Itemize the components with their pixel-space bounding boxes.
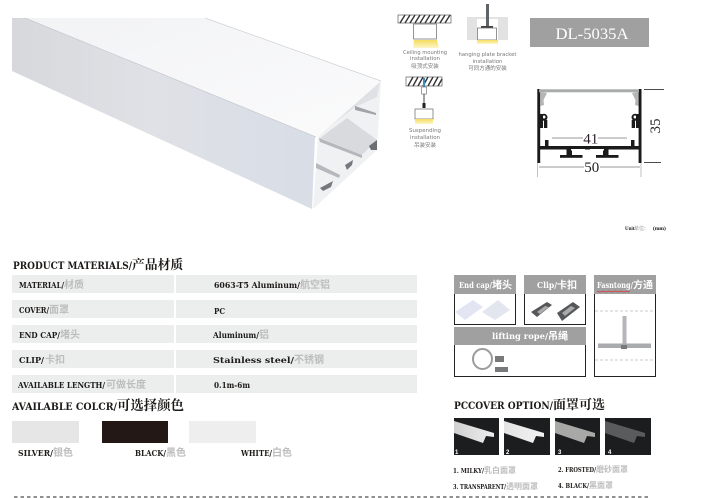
cover option legend: 透明面罩 (506, 481, 538, 492)
table: product materials: Stainless steel/ (213, 355, 294, 365)
product photo: aluminium profile (12, 18, 381, 209)
table: product materials: 航空铝 (300, 276, 330, 291)
cover option legend (453, 464, 628, 492)
table: product materials: 面罩 (49, 301, 69, 316)
colour swatches: SILVER/ (18, 448, 53, 458)
colour swatches: 银色 (53, 444, 73, 459)
heading: available color (11, 395, 184, 414)
cover option legend: 2. FROSTED/ (558, 467, 597, 474)
icon: suspending installation: 吊装安装 (414, 141, 436, 149)
cover option legend: 4. BLACK/ (558, 483, 590, 490)
table: product materials: COVER/ (19, 305, 49, 315)
panel: fastener (594, 275, 656, 376)
table: product materials (12, 275, 417, 393)
panel: clip: Clip/ (537, 280, 557, 290)
cover option thumbnails: 1 (455, 450, 459, 456)
icon: ceiling mounting installation: 吸顶式安装 (411, 62, 439, 70)
unit note: 单位: (634, 225, 646, 232)
table: product materials: Aluminum/ (212, 330, 259, 340)
table: product materials: CLIP/ (19, 355, 44, 365)
unit note: Unit/ (625, 227, 636, 232)
table: product materials: 0.1m-6m (214, 380, 250, 390)
icon: hanging plate bracket installation: hanging plate bracket (458, 52, 517, 58)
cover option thumbnails: 2 (506, 450, 510, 456)
profile cross-section drawing: 50 (584, 160, 599, 176)
table: product materials: AVAILABLE LENGTH/ (17, 380, 105, 390)
cover option thumbnails: 3 (558, 450, 562, 456)
cover option legend: 1. MILKY/ (453, 468, 485, 475)
unit note (625, 225, 666, 232)
table: product materials: 堵头 (60, 326, 80, 341)
cover option legend: 乳白面罩 (484, 465, 516, 476)
heading: PC cover option (454, 394, 605, 413)
icon: suspending installation: installation (410, 135, 441, 141)
profile cross-section drawing: 41 (583, 132, 598, 148)
model badge (530, 18, 649, 47)
cover option thumbnails: 4 (608, 450, 612, 456)
panel: end cap (454, 275, 516, 324)
model badge: DL-5035A (556, 26, 629, 43)
panel: fastener: 方通 (633, 276, 653, 292)
heading: product materials (13, 254, 183, 273)
table: product materials: END CAP/ (19, 330, 60, 340)
panel: clip: 卡扣 (557, 276, 577, 292)
icon: suspending installation (406, 77, 442, 149)
heading: available color: 可选择颜色 (117, 395, 184, 414)
profile cross-section drawing (537, 89, 664, 177)
table: product materials: 材质 (64, 276, 84, 291)
table: product materials: PC (214, 306, 225, 316)
panel: lifting rope (454, 327, 586, 376)
heading: available color: AVAILABLE COLCR/ (11, 401, 117, 413)
table: product materials: 不锈钢 (294, 351, 324, 366)
heading: PC cover option: 面罩可选 (553, 394, 605, 413)
cover option thumbnails (454, 418, 651, 456)
panel: lifting rope: lifting rope/ (492, 331, 548, 341)
cover option legend: 磨砂面罩 (596, 464, 628, 475)
colour swatches: WHITE/ (240, 448, 272, 458)
panel: lifting rope: 吊绳 (548, 328, 568, 342)
profile cross-section drawing: 35 (648, 118, 664, 134)
cover option legend: 3. TRANSPARENT/ (453, 484, 507, 491)
cover option legend: 黑面罩 (589, 480, 613, 491)
table: product materials: 铝 (259, 326, 269, 341)
panel: end cap: End cap/ (459, 280, 492, 290)
colour swatches: 白色 (272, 444, 292, 459)
icon: suspending installation: Suspending (409, 128, 441, 134)
icon: hanging plate bracket installation: 可同方通的安装 (468, 64, 507, 72)
icon: hanging plate bracket installation (458, 4, 517, 72)
table: product materials: 可做长度 (106, 376, 146, 391)
unit note: (mm) (653, 225, 666, 232)
icon: hanging plate bracket installation: installation (472, 59, 503, 65)
panel: end cap: 堵头 (492, 276, 512, 292)
icon: ceiling mounting installation (398, 15, 451, 70)
table: product materials: 6063-T5 Aluminum/ (214, 280, 300, 290)
table: product materials: MATERIAL/ (19, 280, 64, 290)
heading: PC cover option: PCCOVER OPTION/ (454, 400, 553, 412)
heading: product materials: PRODUCT MATERIALS/ (13, 260, 132, 272)
panel: fastener: Fasntong/ (597, 280, 633, 290)
heading: product materials: 产品材质 (132, 254, 183, 273)
table: product materials: 卡扣 (45, 351, 65, 366)
colour swatches (12, 421, 292, 459)
colour swatches: 黑色 (166, 444, 186, 459)
icon: ceiling mounting installation: Ceiling mounting (403, 50, 447, 56)
colour swatches: BLACK/ (135, 448, 166, 458)
icon: ceiling mounting installation: installation (410, 56, 441, 62)
panel: clip (524, 275, 586, 324)
